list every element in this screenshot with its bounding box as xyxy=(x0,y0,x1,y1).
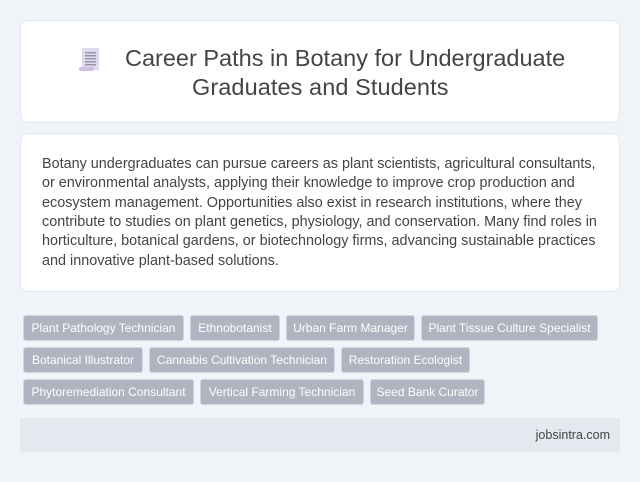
tag xyxy=(149,347,335,373)
tag: Botanical Illustrator xyxy=(32,353,134,367)
tag: Seed Bank Curator xyxy=(376,385,479,399)
tag xyxy=(370,379,485,405)
footer bar xyxy=(20,418,620,452)
title: Career Paths in Botany for Undergraduate xyxy=(125,45,565,71)
description text: Botany undergraduates can pursue careers as plant scientists, agricultural consultants, xyxy=(42,156,596,172)
tag: Cannabis Cultivation Technician xyxy=(157,353,327,367)
icon: scroll xyxy=(79,48,99,71)
description text xyxy=(42,156,597,269)
tag xyxy=(200,379,364,405)
footer text: jobsintra.com xyxy=(536,428,610,442)
panel: title card xyxy=(20,20,620,123)
tag: Ethnobotanist xyxy=(198,321,272,335)
title xyxy=(125,45,565,100)
tag: Vertical Farming Technician xyxy=(209,385,355,399)
description text: horticulture, botanical gardens, or biotechnology firms, advancing sustainable practices xyxy=(42,233,596,249)
description text: contribute to studies on plant genetics, physiology, and conservation. Many find roles in xyxy=(42,214,597,230)
tag xyxy=(23,379,194,405)
description text: or environmental analysts, applying their knowledge to improve crop production and xyxy=(42,175,575,191)
description text: ecosystem management. Opportunities also exist in research institutions, where they xyxy=(42,195,582,211)
tag: Urban Farm Manager xyxy=(293,321,408,335)
tag xyxy=(286,315,415,341)
panel: description xyxy=(20,133,620,292)
tag xyxy=(421,315,598,341)
tag xyxy=(23,315,184,341)
description text: and innovative plant-based solutions. xyxy=(42,253,279,269)
tag xyxy=(23,347,143,373)
tags xyxy=(23,315,598,405)
title: Graduates and Students xyxy=(192,74,449,100)
tag: Restoration Ecologist xyxy=(349,353,462,367)
tag: Plant Pathology Technician xyxy=(32,321,175,335)
tag xyxy=(341,347,470,373)
tag: Phytoremediation Consultant xyxy=(31,385,186,399)
tag: Plant Tissue Culture Specialist xyxy=(428,321,591,335)
tag xyxy=(190,315,280,341)
